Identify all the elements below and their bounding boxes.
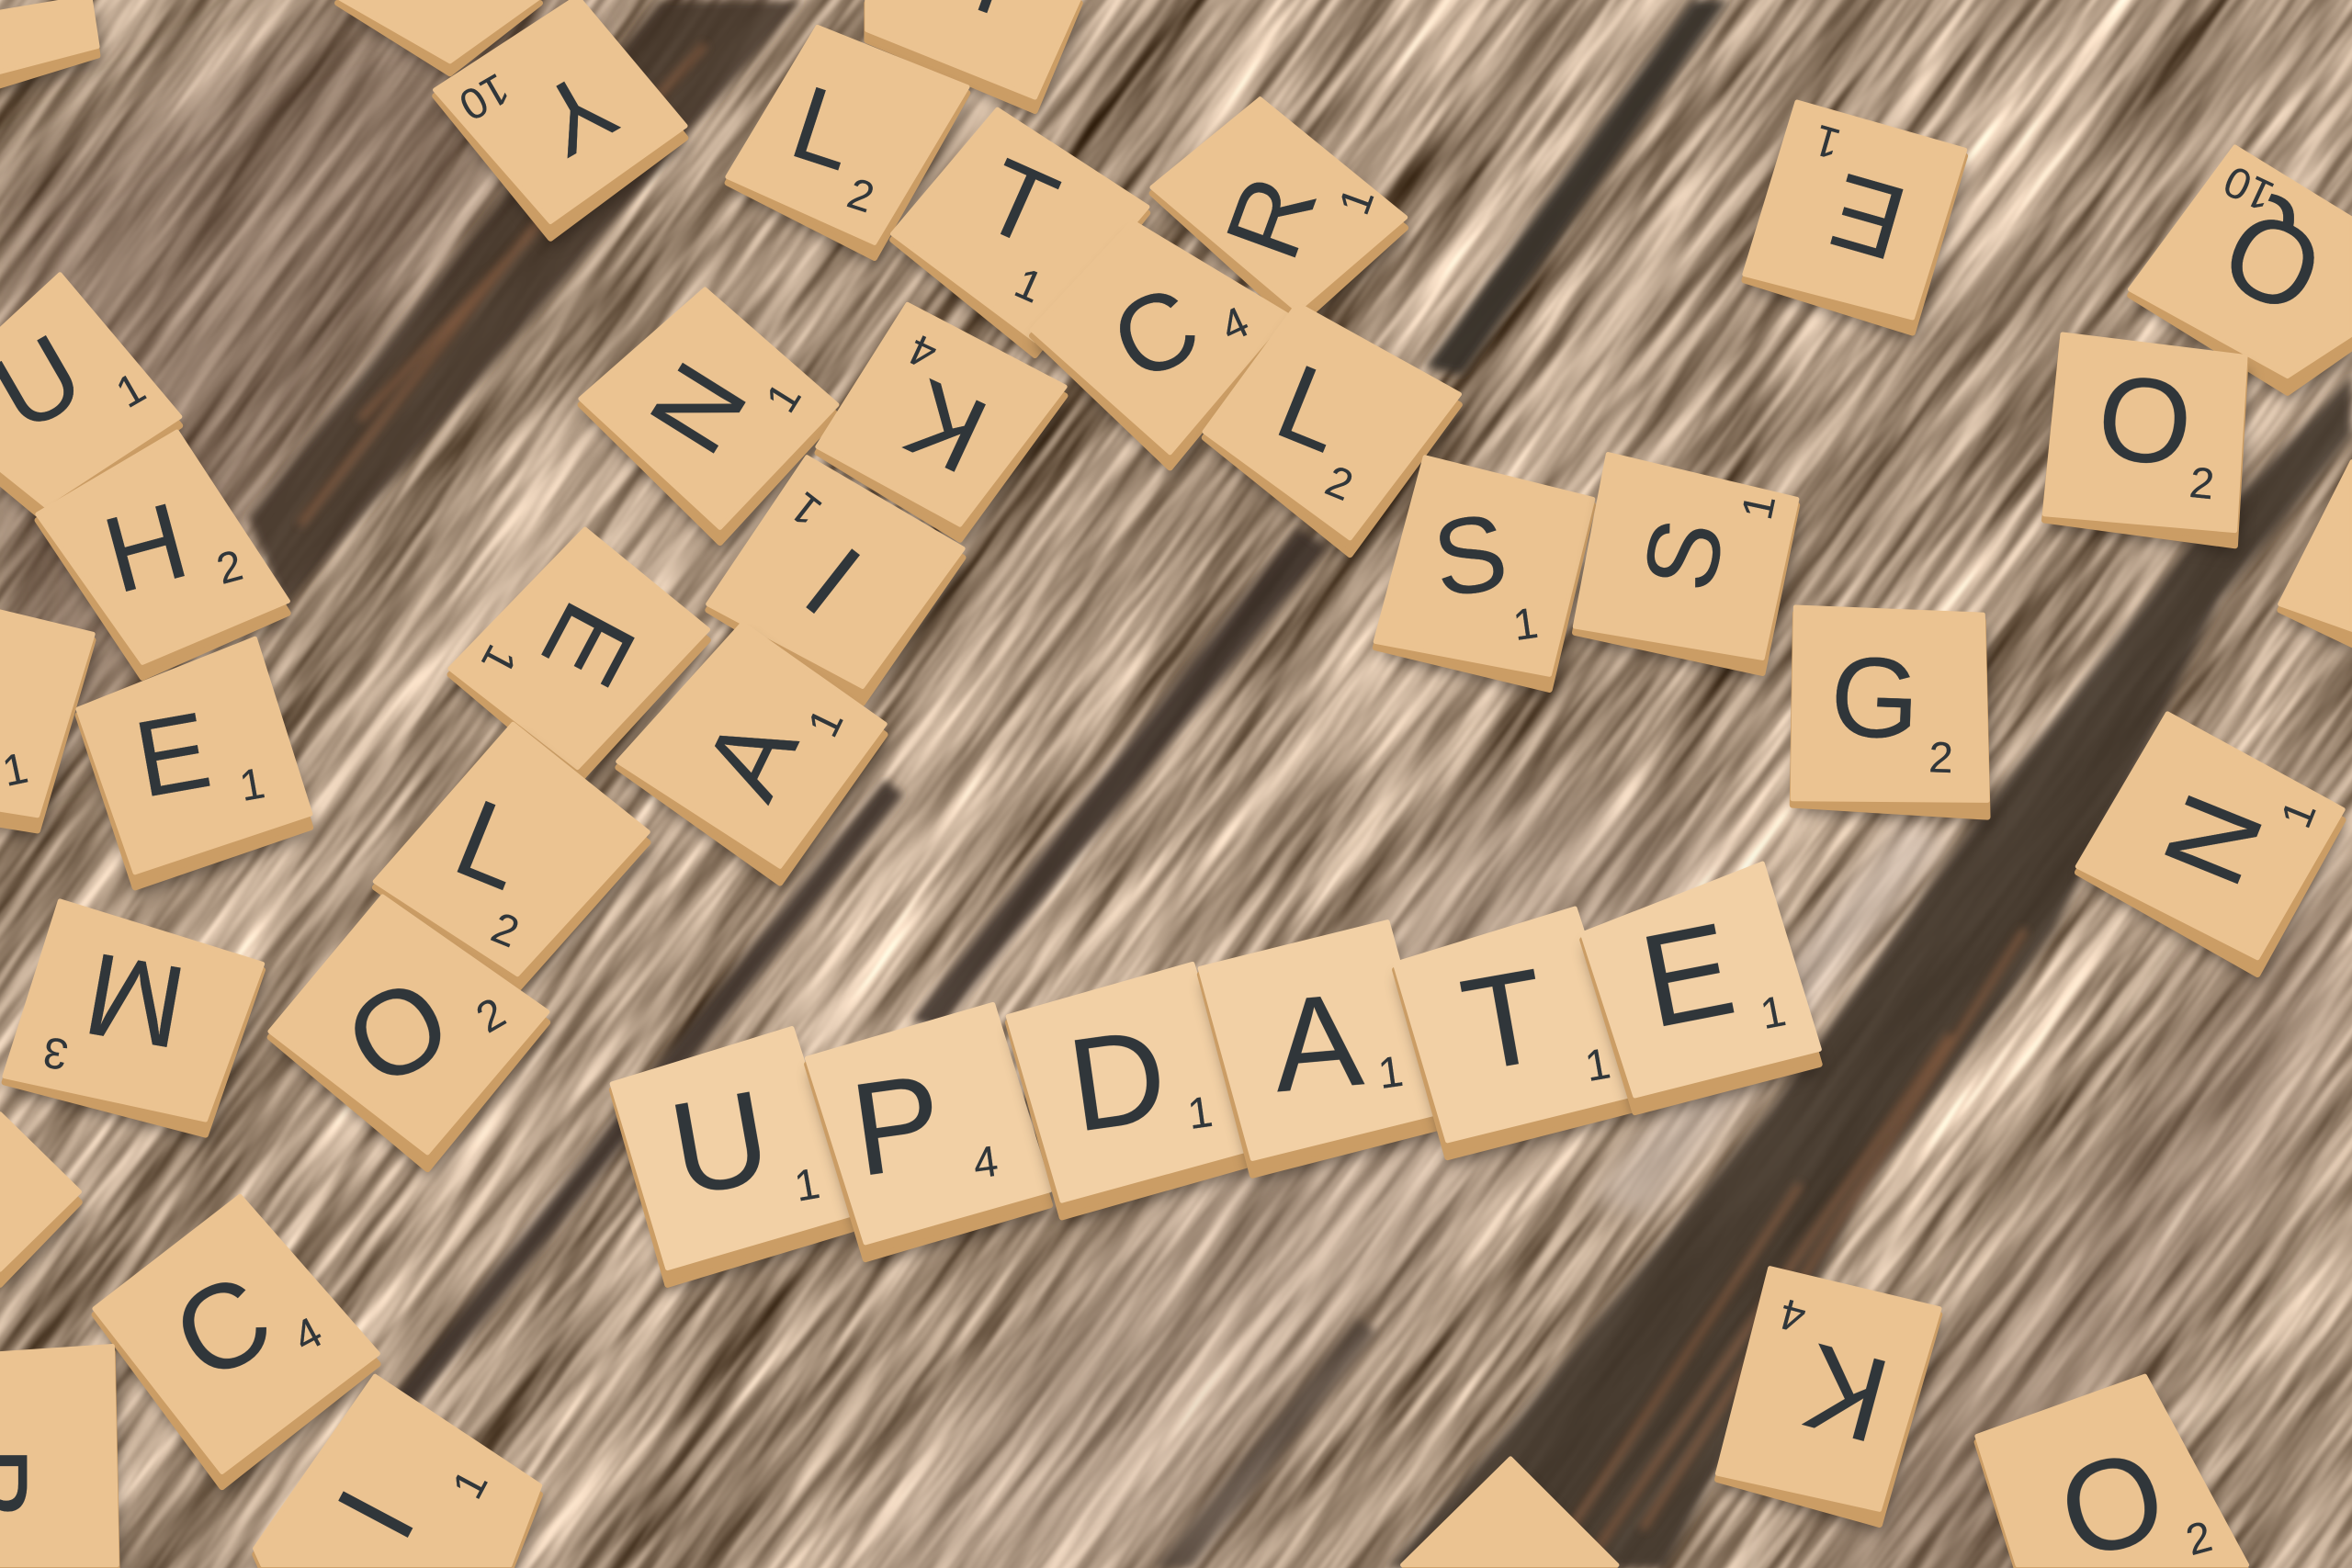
tile: Y [435,0,688,246]
tile: S first: S [1426,491,1514,620]
tile: E left: 1 [236,759,268,811]
tile: S second: S [1621,510,1747,600]
tile: C left: 4 [286,1308,330,1362]
tile: S first: 1 [1510,599,1541,650]
tile: G: 2 [1928,733,1954,783]
tile: D [1008,964,1251,1224]
tile: O lower [270,897,550,1177]
tile: E top right [1745,102,1968,340]
tile: P: P [843,1046,951,1204]
tile: R [1152,99,1408,333]
tile: I: I [784,525,882,637]
tile: O right [2044,334,2248,553]
tile: C left: C [153,1247,292,1406]
tile: S first [1375,457,1596,697]
tile: Q [2130,147,2352,400]
tile: K bottom: 4 [1775,1289,1811,1342]
tile: U left: 1 [108,364,153,418]
tile: T: 1 [1581,1039,1614,1091]
tile: H [38,432,291,685]
tile: M: 3 [40,1027,72,1079]
tile: L second [1204,304,1463,562]
tile: K [818,304,1068,547]
tile: E left [78,638,313,895]
tile: D: 1 [1185,1088,1216,1139]
tile: E: 1 [1757,987,1790,1039]
tile: U left [0,275,183,527]
tile: N right: 1 [2272,794,2326,835]
tile: U: U [661,1063,780,1224]
tile: C [1032,222,1290,475]
tile: A: A [681,698,820,816]
tile: E left: E [127,689,219,820]
tile: I [708,457,966,711]
tile: K: 4 [901,324,944,378]
tile: bottom centre [1403,1459,1620,1568]
tile: N right [2077,714,2346,982]
tile: N: 1 [757,375,811,421]
tile: D: D [1060,1001,1175,1160]
tile: G: G [1828,634,1921,763]
tile: T: T [967,137,1072,270]
tile: C left [95,1196,381,1495]
tile: K bottom [1717,1269,1942,1532]
tile: top edge blank [337,0,543,81]
tile: O right: 2 [2188,458,2216,509]
tile: L [728,27,970,265]
tile: T [1395,908,1638,1165]
tile: E: E [1631,895,1745,1056]
word: UPDATE [612,863,1823,1292]
tile: A [1200,922,1443,1183]
tile: R: R [1204,163,1340,274]
tile: L lower [375,724,651,997]
tile: E [1582,863,1823,1120]
tile: K bottom: K [1789,1318,1901,1469]
tile: Y: 10 [451,63,517,130]
tile: P: 4 [970,1137,1001,1189]
tile: L: 2 [842,169,880,222]
tile: I bottom left [255,1376,543,1568]
tile: M [5,901,266,1143]
tile: I: 1 [782,482,831,536]
tile: C: C [1094,263,1216,404]
tile: H: 2 [211,541,248,594]
tile: M: M [75,928,195,1074]
tile: H: H [93,479,198,616]
tile: O lower: 2 [469,988,514,1043]
tile: Y: Y [521,50,634,178]
tile: U [612,1029,855,1292]
tile: B [0,1346,120,1568]
tile: S second [1575,454,1800,681]
tile: L lower: L [440,775,544,914]
tile: N [581,289,840,550]
tile: right edge blank [2280,462,2352,652]
tile: N right: N [2140,778,2288,902]
tile: top K [867,0,1083,118]
tile: G [1792,607,1991,825]
tile: I bottom left: I [312,1471,439,1559]
tile: S second: 1 [1733,490,1785,524]
tile: O lower: O [324,951,472,1113]
tile: K: K [888,357,1003,496]
tile: O right: O [2091,349,2199,492]
tile: E top right: 1 [1809,115,1846,168]
tile: O bottom right: 2 [2181,1512,2217,1565]
tile: L lower: 2 [485,903,526,957]
tile: L: L [779,64,870,193]
tile: N: N [627,344,770,473]
tile: E upper: E [519,584,659,705]
tile: L second: L [1261,342,1363,475]
tile: A: 1 [798,702,854,745]
tile: Q: Q [2204,184,2342,340]
tile: top-left corner [0,0,100,93]
tile: I bottom left: 1 [443,1462,498,1506]
tile: E upper [450,529,711,790]
tile: P [807,1004,1053,1267]
tile: T: 1 [1008,258,1049,313]
tile: O bottom right [1977,1376,2250,1568]
tile: left blank with 1 [0,612,96,838]
tile: E top right: E [1818,151,1917,282]
tile: R: 1 [1330,182,1384,220]
tile: A: 1 [1375,1047,1406,1099]
tile: A [618,624,888,890]
tile: T [892,109,1150,363]
tile: Q: 10 [2217,156,2281,220]
tile: C: 4 [1214,298,1256,352]
tile: T: T [1453,942,1557,1100]
tile: E upper: 1 [471,637,526,682]
tile: U: 1 [791,1159,823,1212]
tile: left blank lower [0,1114,83,1292]
tile: A: A [1267,966,1367,1120]
tile: L second: 2 [1318,457,1360,511]
